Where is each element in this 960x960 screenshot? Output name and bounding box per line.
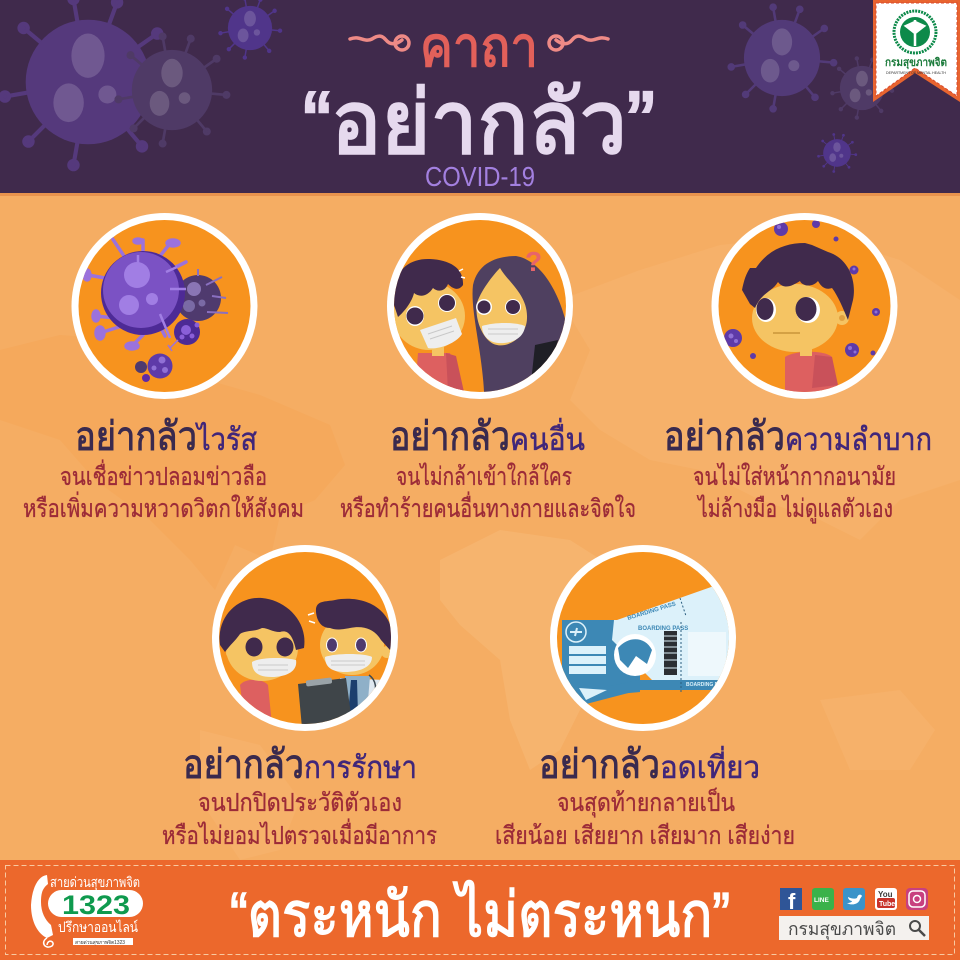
icon: small virus right	[831, 57, 894, 119]
heading: ไวรัส	[194, 422, 257, 457]
icon: tiny virus right	[818, 134, 857, 172]
illustration: boarding passes: BOARDING PASS	[638, 626, 688, 632]
subtitle: COVID-19: COVID-19	[425, 161, 535, 192]
text block: หรือไม่ยอมไปตรวจเมื่อมีอาการ	[162, 818, 437, 850]
hotline badge: สายด่วนสุขภาพจิต	[50, 874, 140, 891]
heading	[539, 743, 760, 787]
text block: เสียน้อย เสียยาก เสียมาก เสียง่าย	[495, 822, 795, 850]
text block: จนเชื่อข่าวปลอมข่าวลือ	[60, 459, 267, 491]
illustration: boarding passes	[550, 545, 736, 731]
logo: department of mental health pennant: กรมสุขภาพจิต	[885, 56, 947, 70]
search box	[779, 916, 929, 940]
panel: fear of other people	[340, 213, 636, 523]
back ticket	[617, 586, 735, 640]
text block: หรือเพิ่มความหวาดวิตกให้สังคม	[23, 491, 304, 523]
illustration: boarding passes: BOARDING PASS	[686, 682, 729, 688]
heading: ความลำบาก	[785, 422, 932, 457]
text block	[495, 787, 795, 850]
heading: อย่ากลัว	[390, 415, 510, 459]
panel: fear of not travelling	[495, 545, 795, 850]
heading: อย่ากลัว	[75, 415, 197, 459]
text block	[162, 789, 437, 850]
text block: หรือทำร้ายคนอื่นทางกายและจิตใจ	[340, 491, 636, 523]
header band	[0, 0, 960, 196]
footer band	[0, 860, 960, 960]
icon: second virus	[116, 34, 229, 146]
panel: fear of treatment	[162, 545, 437, 850]
search box: กรมสุขภาพจิต	[788, 919, 896, 940]
illustration: boy and doctor with clipboard	[212, 545, 398, 731]
icon: large virus left	[1, 0, 177, 169]
ornament right	[549, 36, 608, 50]
logo: department of mental health pennant	[873, 0, 960, 102]
heading	[664, 415, 932, 459]
hotline badge: ปรึกษาออนไลน์	[58, 919, 138, 935]
main ticket	[562, 620, 640, 708]
illustration: boy without mask, viruses around	[712, 213, 898, 399]
icon: small virus top	[219, 0, 282, 59]
icon: line: LINE	[814, 897, 829, 904]
title: คาถา: คาถา	[420, 15, 538, 78]
heading: การรักษา	[304, 750, 417, 785]
icon: virus right	[729, 5, 836, 111]
logo: department of mental health pennant: DEPARTMENT OF MENTAL HEALTH	[886, 70, 946, 75]
heading	[183, 743, 417, 787]
icon: phone handset	[31, 875, 53, 938]
illustration: boy and girl in masks	[387, 213, 573, 399]
heading: คนอื่น	[510, 418, 585, 457]
icon: youtube: Tube	[879, 901, 895, 908]
text block: จนไม่ใส่หน้ากากอนามัย	[693, 462, 896, 491]
heading: อย่ากลัว	[183, 743, 304, 787]
ornament left	[350, 36, 409, 50]
title: อย่ากลัว: “อย่ากลัว”	[303, 73, 655, 172]
illustration: boarding passes: BOARDING PASS	[627, 601, 677, 622]
illustration: viruses in circle	[72, 213, 258, 399]
world map background	[0, 235, 960, 860]
icon: instagram	[906, 888, 928, 910]
icon: facebook: f	[788, 889, 796, 914]
hotline badge: สายด่วนสุขภาพจิต1323	[75, 939, 125, 946]
text block: จนสุดท้ายกลายเป็น	[557, 787, 735, 818]
icon: twitter	[843, 888, 865, 910]
icon: youtube: You	[878, 890, 893, 899]
heading: อย่ากลัว	[539, 743, 660, 787]
icon: facebook	[780, 888, 802, 914]
text block: ไม่ล้างมือ ไม่ดูแลตัวเอง	[696, 494, 893, 524]
slogan: “ตระหนัก ไม่ตระหนก”	[230, 880, 730, 950]
hotline badge	[31, 874, 143, 947]
heading: อย่ากลัว	[664, 415, 785, 459]
panel: fear of virus	[23, 213, 304, 523]
text block	[340, 462, 636, 523]
panel: fear of hardship	[664, 213, 932, 524]
icon: youtube	[875, 888, 897, 910]
icon: question mark: ?	[525, 246, 542, 277]
text block	[693, 462, 896, 524]
text block: จนปกปิดประวัติตัวเอง	[198, 789, 402, 817]
heading: อดเที่ยว	[660, 746, 760, 785]
text block	[23, 459, 304, 523]
social icons	[780, 888, 928, 914]
text block: จนไม่กล้าเข้าใกล้ใคร	[396, 462, 572, 491]
icon: line	[812, 888, 834, 910]
hotline badge: 1323	[62, 890, 130, 920]
